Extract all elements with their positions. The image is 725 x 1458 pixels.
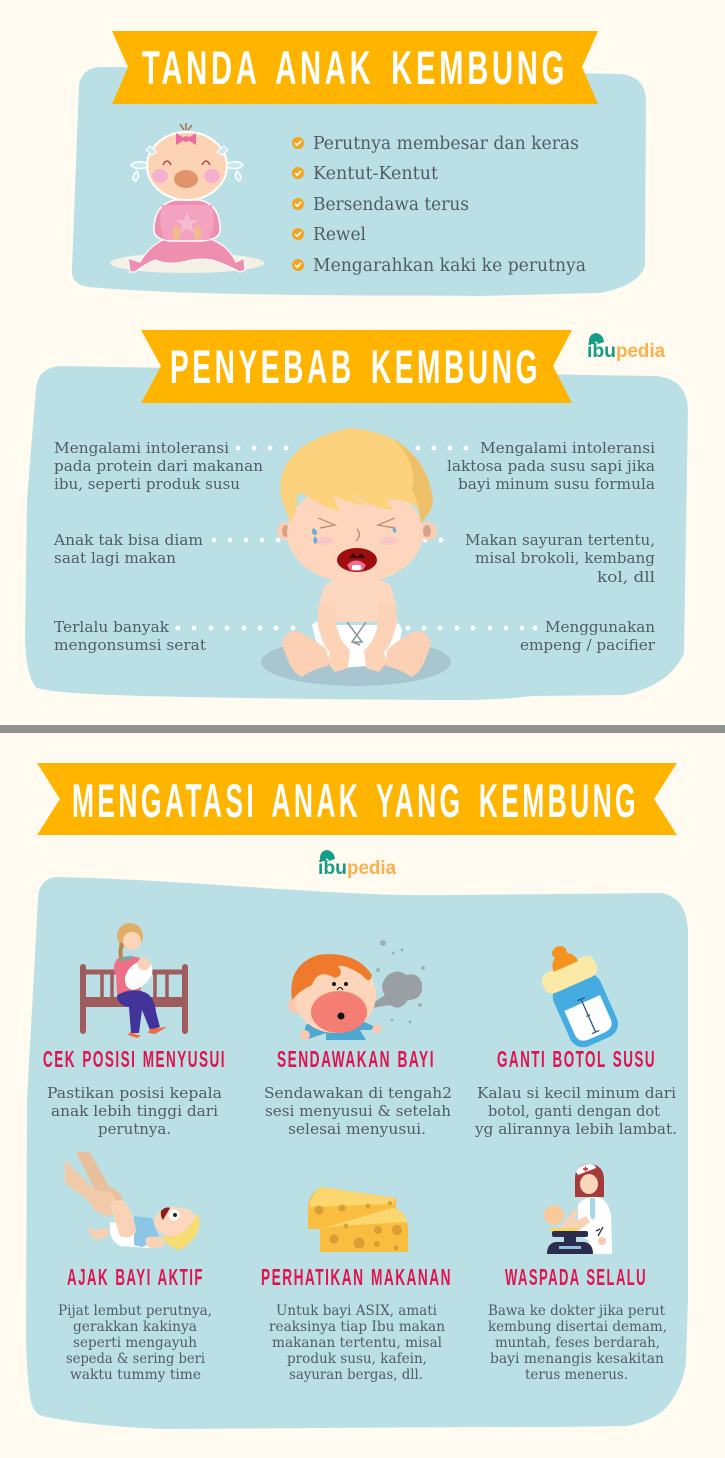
dotted connectors xyxy=(176,446,537,630)
text: perhatikan makanan xyxy=(269,1303,445,1383)
icon: crying blond baby xyxy=(261,428,451,686)
text: waspada selalu: Bawa ke dokter jika perut xyxy=(488,1303,665,1319)
checklist: tanda: Mengarahkan kaki ke perutnya xyxy=(313,256,586,276)
text: perhatikan makanan: reaksinya tiap Ibu makan xyxy=(269,1319,445,1335)
text: waspada selalu: muntah, feses berdarah, xyxy=(495,1335,660,1351)
item: waspada selalu xyxy=(488,1164,667,1383)
text: cause right 1: Mengalami intoleransi xyxy=(480,439,655,457)
logo: ibupedia top: pedia xyxy=(616,341,665,362)
text: ajak bayi aktif: seperti mengayuh xyxy=(73,1335,197,1351)
checklist: tanda: Perutnya membesar dan keras xyxy=(313,134,579,154)
text: ganti botol susu: Kalau si kecil minum dari xyxy=(477,1085,676,1102)
text: cause left 2: Anak tak bisa diam xyxy=(53,531,203,549)
banner: tanda anak kembung xyxy=(112,31,598,104)
text: cause right 3: empeng / pacifier xyxy=(520,636,656,654)
icon: hands massaging baby xyxy=(65,1152,200,1250)
text: waspada selalu xyxy=(488,1303,667,1383)
divider bar xyxy=(0,725,725,733)
text: waspada selalu: bayi menangis kesakitan xyxy=(490,1351,664,1367)
banner: penyebab kembung xyxy=(141,330,572,403)
text: sendawakan bayi: selesai menyusui. xyxy=(288,1121,426,1138)
text: sendawakan bayi: sesi menyusui & setelah xyxy=(265,1103,451,1120)
panel: penyebab kembung xyxy=(25,330,688,700)
panel: tanda anak kembung xyxy=(72,31,646,296)
text: ajak bayi aktif xyxy=(58,1303,212,1383)
icon: doctor and baby scale xyxy=(544,1164,612,1254)
checklist: tanda: Bersendawa terus xyxy=(313,195,469,215)
checklist: tanda: Rewel xyxy=(313,225,366,245)
icon: crying baby girl xyxy=(110,123,264,273)
text: cek posisi menyusui: perutnya. xyxy=(98,1121,171,1138)
item: cek posisi menyusui xyxy=(43,923,226,1138)
banner: mengatasi anak yang kembung xyxy=(37,763,677,835)
text: ganti botol susu xyxy=(474,1085,677,1138)
text: cause right 1: laktosa pada susu sapi jika xyxy=(447,457,655,475)
checklist: tanda: Kentut-Kentut xyxy=(313,164,438,184)
icon: mother nursing on bench xyxy=(83,923,185,1038)
text: cek posisi menyusui: anak lebih tinggi dari xyxy=(51,1103,218,1120)
text: cause left 2: saat lagi makan xyxy=(54,549,176,567)
panel: mengatasi anak kembung xyxy=(26,877,688,1429)
text: perhatikan makanan: sayuran bergas, dll. xyxy=(289,1367,423,1383)
text: perhatikan makanan: makanan tertentu, misal xyxy=(272,1335,442,1351)
text: cause left 1: pada protein dari makanan xyxy=(54,457,263,475)
icon: burping boy xyxy=(288,940,425,1040)
item: sendawakan bayi xyxy=(264,940,452,1138)
text: cause right 3: Menggunakan xyxy=(545,618,655,636)
item: perhatikan makanan xyxy=(261,1187,452,1383)
text: cause left 3: Terlalu banyak xyxy=(54,618,170,636)
item: ganti botol susu xyxy=(474,935,677,1138)
text: cek posisi menyusui: Pastikan posisi kepala xyxy=(47,1085,222,1102)
text: waspada selalu: terus menerus. xyxy=(525,1367,628,1383)
heading: perhatikan makanan: PERHATIKAN MAKANAN xyxy=(261,1264,452,1290)
text: cause right 3 xyxy=(520,618,656,654)
heading: ajak bayi aktif: AJAK BAYI AKTIF xyxy=(67,1264,204,1290)
text: ajak bayi aktif: sepeda & sering beri xyxy=(66,1351,206,1367)
text: cause left 3: mengonsumsi serat xyxy=(54,636,206,654)
logo: ibupedia top: ibu xyxy=(587,341,616,362)
text: cause right 2 xyxy=(465,531,655,586)
text: sendawakan bayi: Sendawakan di tengah2 xyxy=(264,1085,452,1102)
icon: cheese xyxy=(308,1187,408,1252)
checklist: tanda xyxy=(292,134,586,276)
logo: ibupedia middle: pedia xyxy=(347,858,396,879)
text: ajak bayi aktif: waktu tummy time xyxy=(70,1367,201,1383)
text: sendawakan bayi xyxy=(264,1085,452,1138)
text: ajak bayi aktif: gerakkan kakinya xyxy=(73,1319,197,1335)
text: waspada selalu: kembung disertai demam, xyxy=(488,1319,667,1335)
text: cause right 2: kol, dll xyxy=(597,568,655,586)
text: perhatikan makanan: produk susu, kafein, xyxy=(287,1351,427,1367)
heading: cek posisi menyusui: CEK POSISI MENYUSUI xyxy=(43,1046,226,1072)
text: cause left 1: ibu, seperti produk susu xyxy=(54,475,240,493)
icon: milk bottle xyxy=(531,935,625,1053)
text: ajak bayi aktif: Pijat lembut perutnya, xyxy=(58,1303,212,1319)
text: cause right 2: misal brokoli, kembang xyxy=(475,549,655,567)
logo: ibupedia top xyxy=(587,333,665,362)
text: cause right 1: bayi minum susu formula xyxy=(458,475,655,493)
logo: ibupedia middle xyxy=(318,850,396,879)
logo: ibupedia middle: ibu xyxy=(318,858,347,879)
text: cause right 1 xyxy=(447,439,655,493)
text: ganti botol susu: yg alirannya lebih lambat. xyxy=(474,1121,677,1138)
text: ganti botol susu: botol, ganti dengan dot xyxy=(488,1103,660,1120)
text: cek posisi menyusui xyxy=(47,1085,222,1138)
text: cause left 1: Mengalami intoleransi xyxy=(54,439,229,457)
text: cause left 2 xyxy=(53,531,203,567)
text: cause left 3 xyxy=(54,618,206,654)
text: cause left 1 xyxy=(54,439,263,493)
text: perhatikan makanan: Untuk bayi ASIX, amati xyxy=(276,1303,438,1319)
item: ajak bayi aktif xyxy=(58,1152,212,1383)
heading: sendawakan bayi: SENDAWAKAN BAYI xyxy=(277,1046,435,1072)
text: cause right 2: Makan sayuran tertentu, xyxy=(465,531,655,549)
